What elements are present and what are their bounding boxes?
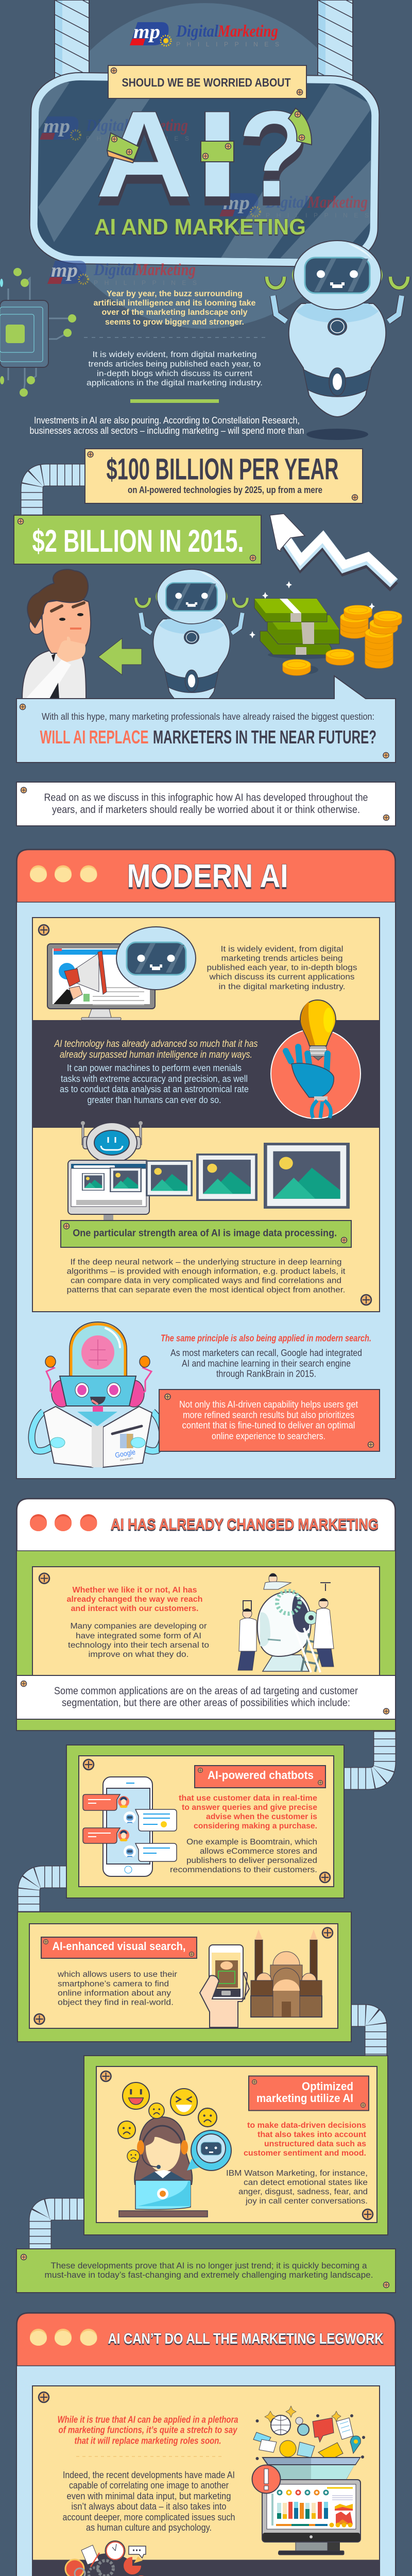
section panel: can't do all the legwork: [16, 2313, 396, 2576]
AI surpassed text: AI technology has already advanced so much that it has: [54, 1039, 258, 1049]
white box: common applications: segmentation, but there are other areas of possibilities which include:: [62, 1697, 350, 1708]
hero lighter circle: [42, 3, 368, 329]
panel: chatbots: [66, 1745, 344, 1898]
chatbots heading: AI-powered chatbots: [208, 1769, 314, 1782]
visual search text: [57, 1970, 177, 2007]
brain robot reading book: RankBrain: [120, 1457, 133, 1462]
watermark logo 1: Digital: [85, 116, 129, 135]
already changed text: have integrated some form of AI: [76, 1632, 201, 1640]
investments text: businesses across all sectors – including marketing – will spend more than: [30, 426, 304, 436]
hero frame: [29, 72, 380, 268]
robot head 3: [116, 927, 196, 990]
plethora text: Indeed, the recent developments have made AI: [63, 2470, 235, 2480]
robot shadow: [306, 429, 368, 440]
stat banner: $2 billion: $2 BILLION IN 2015.: [32, 523, 244, 558]
speech panel: will AI replace marketers: [16, 676, 396, 762]
head with brain icons: [65, 2541, 173, 2576]
text: widely evident 2: in the digital marketing industry.: [218, 982, 345, 991]
speech panel: will AI replace marketers: WILL AI REPLACE: [40, 726, 148, 748]
pipe connecting stat banners: [32, 475, 88, 516]
investments text: [30, 415, 304, 436]
plethora text: capable of correlating one image to another: [69, 2480, 229, 2490]
visual search text: which allows users to use their: [57, 1970, 177, 1979]
green panel: developments: [16, 2249, 396, 2293]
white panel: read on: [16, 782, 396, 826]
watermark logo 2: Marketing: [307, 193, 368, 212]
green bar: image data processing: [61, 1221, 351, 1247]
text: widely evident 2: [207, 945, 357, 991]
chatbots text: allows eCommerce stores and: [200, 1847, 317, 1856]
watermark logo 2: PHILIPPINES: [266, 212, 369, 219]
already changed text: improve on what they do.: [89, 1650, 188, 1659]
coral box: refined search: Not only this AI-driven capability helps users get: [179, 1399, 358, 1410]
same principle text: [161, 1333, 371, 1379]
section panel: already changed marketing: [16, 1498, 396, 1731]
white box: common applications: Some common applications are on the areas of ad targeting and customer: [54, 1685, 358, 1697]
already changed text: and interact with our customers.: [71, 1604, 199, 1613]
watermark logo 1: [40, 115, 189, 142]
watermark logo 3: PHILIPPINES: [94, 279, 197, 286]
already changed text: already changed the way we reach: [67, 1595, 203, 1604]
monitor with megaphone: [47, 944, 155, 1020]
visual search heading: AI-enhanced visual search,: [53, 1940, 185, 1953]
already changed text: technology into their tech arsenal to: [68, 1641, 209, 1650]
green panel: developments: These developments prove that AI is no longer just trend; it is quickly becoming a: [50, 2261, 367, 2270]
chatbots text: to answer queries and give precise: [182, 1803, 317, 1812]
text: widely evident 2: It is widely evident, from digital: [220, 945, 343, 954]
modern AI title: MODERN AI: [127, 857, 288, 894]
panel: visual search: [18, 1912, 351, 2042]
optimized heading: [249, 2076, 369, 2110]
brain robot reading book: [32, 1322, 163, 1467]
stat banner: $100 billion: [85, 449, 363, 503]
green arrow speech: [98, 638, 142, 675]
green panel: developments: must-have in today’s fast-changing and extremely challenging marketing landscape.: [44, 2270, 373, 2280]
pipe left to developments: [40, 2209, 85, 2250]
plethora text: While it is true that AI can be applied in a plethora: [58, 2414, 238, 2425]
hand holding phone: [200, 1945, 249, 2027]
visual search text: online information about any: [58, 1989, 171, 1998]
big AI? heading: I: [194, 85, 241, 223]
watermark logo 3: mp: [51, 260, 78, 281]
AI surpassed text: as to conduct data analysis at an astronomical rate: [60, 1084, 249, 1094]
optimized text: to make data-driven decisions: [247, 2121, 366, 2130]
optimized text: [226, 2121, 368, 2206]
chatbots text: recommendations to their customers.: [170, 1866, 317, 1874]
scientists building AI head: [238, 1573, 334, 1672]
AI surpassed text: greater than humans can ever do so.: [88, 1095, 221, 1105]
yellow card: legwork: [32, 2386, 380, 2576]
optimized heading: marketing utilize AI: [256, 2092, 353, 2105]
deep neural network text: algorithms – is provided with enough information, e.g. product labels, it: [67, 1267, 346, 1276]
main logo: PHILIPPINES: [176, 41, 279, 48]
text: widely evident 2: which discuss its current applications: [209, 973, 355, 981]
pipe right to chatbots: [343, 1731, 385, 1778]
dark band: social intelligence: [32, 2560, 380, 2576]
window dots: [30, 866, 97, 882]
circuit chip: [0, 268, 76, 397]
plethora text: of marketing functions, it’s quite a stretch to say: [59, 2425, 237, 2435]
section panel: modern AI: [16, 849, 396, 1479]
text: widely evident 2: published each year, to in-depth blogs: [207, 963, 357, 972]
already changed text: Whether we like it or not, AI has: [72, 1586, 197, 1595]
optimized text: joy in call center conversations.: [245, 2197, 368, 2206]
zigzag growth arrow: [270, 514, 394, 587]
banner: should we be worried: SHOULD WE BE WORRIED ABOUT: [122, 76, 290, 89]
already changed text: Many companies are developing or: [70, 1622, 207, 1631]
watermark logo 2: Digital: [265, 193, 308, 212]
chatbots text: One example is Boomtrain, which: [186, 1838, 317, 1846]
visual search text: smartphone’s camera to find: [58, 1979, 169, 1989]
banner: should we be worried: [108, 65, 306, 98]
coral box: refined search: content that is fine-tuned to deliver an optimal: [182, 1420, 355, 1431]
optimized text: unstructured data such as: [264, 2140, 366, 2148]
pipe left to visual search: [29, 1877, 67, 1912]
white panel: read on: years, and if marketers should really be worried about it or think otherwise.: [52, 804, 360, 816]
dark band: [33, 1020, 379, 1128]
chatbots text: considering making a purchase.: [194, 1822, 317, 1831]
intro text yellow: Year by year, the buzz surrounding: [107, 290, 243, 298]
white panel: read on: Read on as we discuss in this infographic how AI has developed throughout the: [44, 791, 368, 804]
watermark logo 3: [47, 260, 197, 286]
main logo: Digital: [176, 22, 219, 41]
green divider: [130, 399, 219, 403]
robot hand holding bulb: [271, 1000, 360, 1118]
AI surpassed text: tasks with extreme accuracy and precision, as well: [61, 1074, 248, 1084]
speech panel: will AI replace marketers: With all this hype, many marketing professionals have already raised the biggest question:: [42, 711, 374, 722]
intro text white: in-depth blogs which discuss its current: [97, 369, 253, 378]
window dots: [30, 1514, 97, 1531]
watermark logo 1: mp: [43, 115, 70, 137]
left hanging pillar: [55, 0, 89, 88]
coral header: [17, 2313, 395, 2366]
visual search text: object they find in real-world.: [58, 1998, 174, 2007]
optimized text: that also takes into account: [258, 2130, 367, 2139]
pipe right to optimized: [350, 2015, 376, 2057]
big AI? heading: [95, 85, 310, 223]
intro text white: trends articles being published each year, to: [89, 360, 261, 369]
coral box: refined search: online experience to searchers.: [212, 1431, 325, 1442]
watermark logo 1: Marketing: [127, 116, 188, 135]
same principle text: through RankBrain in 2015.: [216, 1369, 316, 1379]
plethora text: even with minimal data input, but marketing: [67, 2491, 231, 2501]
customer service woman with emojis: [118, 2082, 231, 2217]
intro text white: [87, 350, 263, 387]
intro text white: applications in the digital marketing industry.: [87, 379, 263, 387]
optimized text: IBM Watson Marketing, for instance,: [226, 2169, 368, 2178]
AI surpassed text: already surpassed human intelligence in many ways.: [60, 1049, 252, 1060]
white header band: [17, 1499, 395, 1551]
big AI? heading: ?: [238, 85, 310, 223]
chatbots heading: [195, 1766, 325, 1788]
intro text white: It is widely evident, from digital marketing: [93, 350, 256, 359]
yellow card: modern AI: [32, 918, 380, 1312]
same principle text: As most marketers can recall, Google had integrated: [170, 1348, 362, 1358]
main logo: mp: [133, 21, 160, 43]
investments text: Investments in AI are also pouring. According to Constellation Research,: [34, 415, 300, 426]
funnel into data monitor: [252, 2406, 365, 2555]
optimized text: anger, disgust, sadness, fear, and: [238, 2188, 368, 2196]
brain robot reading book: Google: [114, 1448, 136, 1459]
big AI? heading: A: [95, 85, 193, 223]
cash stacks and coins: [249, 581, 402, 675]
plethora text: that it will replace marketing roles soon.: [74, 2436, 221, 2446]
chatbots text: advise when the customer is: [206, 1812, 317, 1821]
robot mascot: [267, 241, 408, 417]
yellow card: already changed: [32, 1567, 380, 1675]
watermark logo 2: mp: [223, 192, 250, 214]
robot at monitor with picture frames: [68, 1121, 350, 1222]
intro text yellow: over of the marketing landscape only: [102, 308, 248, 317]
chatbots text: publishers to deliver personalized: [186, 1856, 317, 1865]
plethora text: account deeper, more complicated issues such: [63, 2512, 235, 2522]
already changed text: [67, 1586, 209, 1659]
mosque: [251, 1929, 322, 2017]
watermark logo 3: Marketing: [135, 261, 196, 279]
optimized heading: Optimized: [302, 2080, 353, 2093]
deep neural network text: [67, 1258, 346, 1295]
same principle text: AI and machine learning in their search engine: [182, 1358, 351, 1368]
main logo: [130, 21, 279, 48]
subtitle: AI and marketing: AI AND MARKETING: [94, 214, 306, 240]
intro text yellow: seems to grow bigger and stronger.: [105, 318, 244, 327]
deep neural network text: patterns that can separate even the most identical object from another.: [67, 1286, 345, 1295]
deep neural network text: If the deep neural network – the underlying structure in deep learning: [70, 1258, 342, 1266]
AI surpassed text: [54, 1039, 258, 1105]
watermark logo 3: Digital: [93, 261, 136, 279]
green bolted plates on letters: [107, 108, 312, 163]
panel: optimized marketing: [84, 2056, 388, 2235]
chatbots text: [170, 1794, 317, 1874]
thinking man: [22, 569, 91, 699]
chatbots text: that use customer data in real-time: [179, 1794, 317, 1803]
watermark logo 2: [219, 192, 369, 219]
phone with chat bubbles: [83, 1777, 177, 1876]
visual search heading: [41, 1937, 197, 1958]
stat banner: $100 billion: on AI-powered technologies by 2025, up from a mere: [128, 485, 322, 495]
intro text yellow: [94, 290, 256, 327]
plethora text: as human culture and psychology.: [86, 2522, 212, 2533]
coral box: refined search: [159, 1389, 380, 1451]
right hanging pillar: [318, 0, 353, 91]
optimized text: can detect emotional states like: [244, 2178, 368, 2187]
watermark logo 1: PHILIPPINES: [86, 135, 189, 142]
modern AI header band: [17, 850, 395, 902]
green bar: image data processing: One particular strength area of AI is image data processing.: [73, 1228, 337, 1239]
intro text yellow: artificial intelligence and its looming take: [94, 299, 256, 308]
optimized text: customer sentiment and mood.: [244, 2149, 366, 2158]
plethora text: [58, 2414, 238, 2533]
main logo: Marketing: [217, 22, 278, 41]
window dots: [30, 2329, 97, 2346]
deep neural network text: can compare data in very complicated ways and find correlations and: [71, 1277, 341, 1285]
plethora text: isn’t always about data – it also takes into: [71, 2501, 227, 2512]
text: widely evident 2: marketing trends articles being: [221, 954, 343, 963]
coral box: refined search: more refined search results but also prioritizes: [183, 1410, 354, 1420]
robot mascot 2: [136, 569, 247, 708]
white box: common applications: [16, 1675, 396, 1719]
AI surpassed text: It can power machines to perform even menials: [67, 1063, 242, 1073]
stat banner: $2 billion: [14, 515, 261, 564]
